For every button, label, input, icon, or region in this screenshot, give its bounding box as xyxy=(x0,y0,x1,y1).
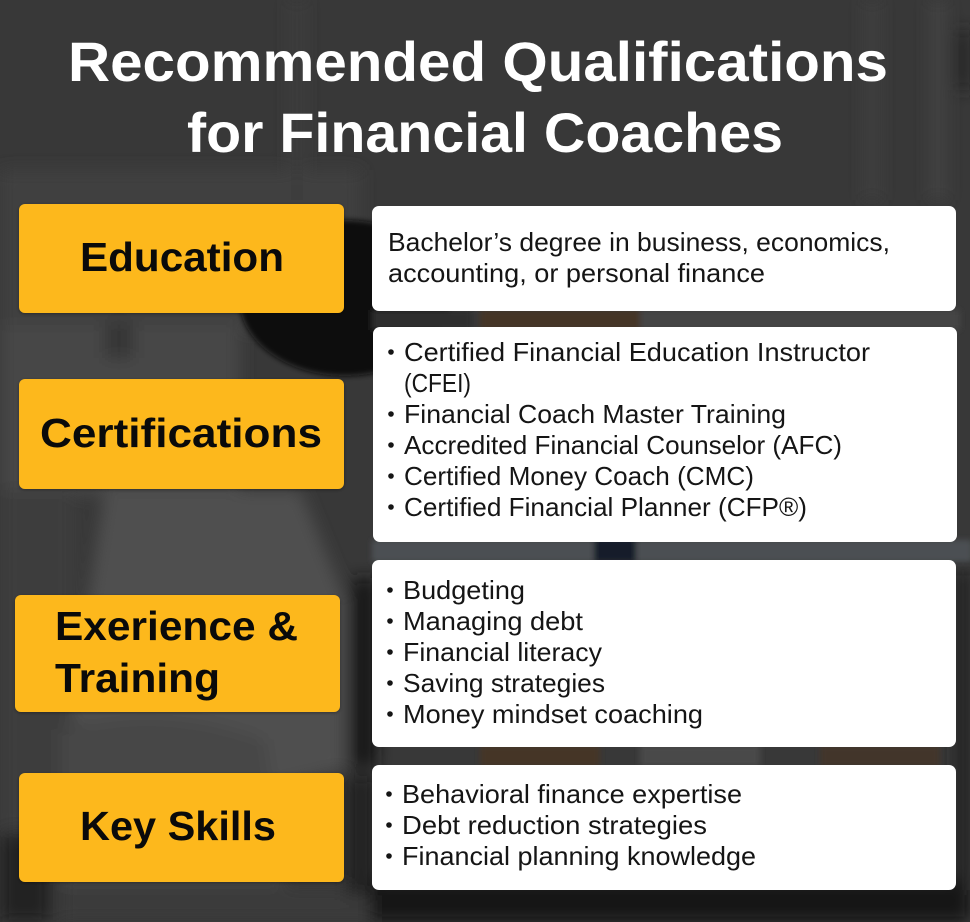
row: key skills xyxy=(19,765,956,890)
panel: key skills list: Behavioral finance expertise xyxy=(402,779,742,809)
panel: experience list: Saving strategies xyxy=(403,668,605,698)
panel: experience list: Managing debt xyxy=(403,606,584,636)
label: Key Skills xyxy=(19,773,344,882)
panel: experience list: Financial literacy xyxy=(403,637,602,667)
panel: certifications list: Financial Coach Master Training xyxy=(404,399,786,429)
title xyxy=(68,30,888,164)
panel: experience list xyxy=(372,560,956,747)
panel: certifications list: (CFEI) xyxy=(404,368,471,398)
panel: key skills list: Financial planning knowledge xyxy=(402,841,756,871)
label: Education: Education xyxy=(80,234,284,280)
label: Exerience & Training xyxy=(15,595,340,712)
panel: certifications list xyxy=(373,327,957,542)
panel: experience list: Money mindset coaching xyxy=(403,699,703,729)
title: for Financial Coaches xyxy=(187,101,783,164)
panel: certifications list: Certified Money Coach (CMC) xyxy=(404,461,754,491)
label: Key Skills: Key Skills xyxy=(80,803,276,849)
panel: education details: accounting, or personal finance xyxy=(388,258,765,288)
panel: key skills list: Debt reduction strategies xyxy=(402,810,707,840)
row: experience and training xyxy=(15,560,956,747)
row: education xyxy=(19,204,956,313)
panel: certifications list: Certified Financial Education Instructor xyxy=(404,337,870,367)
label: Certifications: Certifications xyxy=(40,410,322,456)
panel: education details: Bachelor’s degree in business, economics, xyxy=(388,227,890,257)
panel: key skills list xyxy=(372,765,956,890)
panel: education details xyxy=(372,206,956,311)
row: certifications xyxy=(19,327,957,542)
panel: experience list: Budgeting xyxy=(403,575,525,605)
panel: certifications list: Accredited Financial Counselor (AFC) xyxy=(404,430,842,460)
label: Exerience & Training: Training xyxy=(55,655,220,701)
label: Certifications xyxy=(19,379,344,489)
title: Recommended Qualifications xyxy=(68,30,888,93)
label: Education xyxy=(19,204,344,313)
panel: certifications list: Certified Financial Planner (CFP®) xyxy=(404,492,807,522)
label: Exerience & Training: Exerience & xyxy=(55,603,298,649)
